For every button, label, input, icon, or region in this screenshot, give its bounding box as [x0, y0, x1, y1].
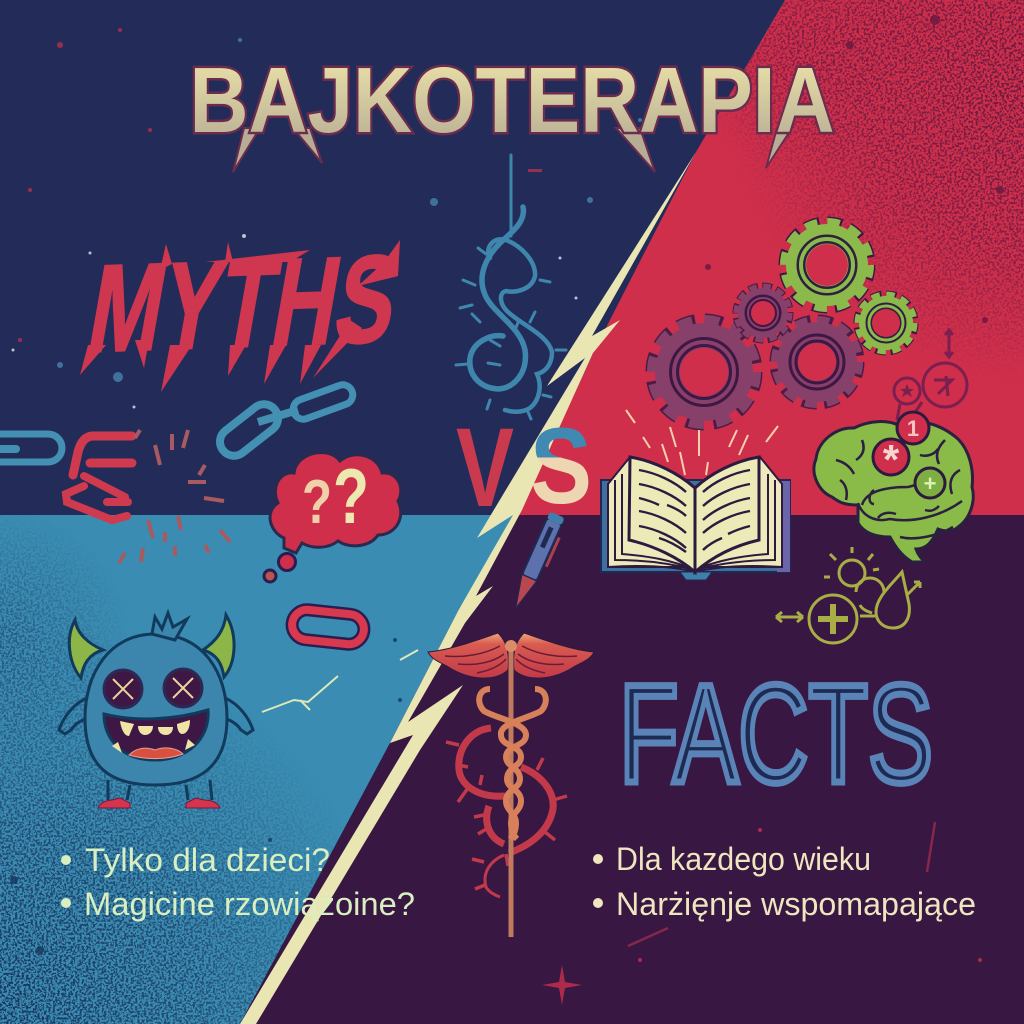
icon: crack scribble: [262, 650, 418, 712]
text: versus: [456, 405, 592, 530]
gear: small purple: [738, 288, 788, 338]
bullet list: facts: [593, 841, 976, 922]
icon: chain link lower: [291, 608, 365, 646]
icon: broken chain left: [0, 430, 230, 563]
bullet list: myths: [61, 842, 415, 922]
heading: myths: [79, 228, 409, 392]
text: versus: S: [530, 405, 592, 526]
wing: right: [514, 633, 594, 678]
bullet list: myths: Tylko dla dzieci?: [85, 842, 330, 878]
icon: open book: [601, 410, 790, 580]
icon: broken chain right: [214, 382, 356, 461]
staff: [508, 645, 514, 937]
icon: thorny vine top: [456, 155, 566, 419]
icon: brain: [814, 412, 973, 562]
icon: monster: [59, 613, 253, 808]
lightning bolt divider: [240, 152, 696, 1024]
feather lines: [445, 646, 577, 673]
icon: process symbols: [776, 547, 920, 643]
icon: thought bubble: [264, 452, 401, 582]
gear: small green: [859, 296, 913, 350]
gear: large purple: [655, 323, 753, 421]
bullet list: myths: Magicine rzowiążoine?: [84, 886, 415, 922]
thorn rings: [446, 728, 567, 897]
icon: pen: [509, 512, 567, 612]
gear: medium purple: [777, 322, 857, 402]
title: BAJKOTERAPIA: [190, 48, 834, 152]
bullet list: facts: Narżięnje wspomapające: [616, 886, 976, 922]
icon: thought bubble: ?: [302, 468, 332, 537]
text: versus: V: [456, 405, 514, 530]
serpents: [479, 689, 546, 839]
wing: left: [428, 633, 508, 678]
gear: large green: [786, 224, 868, 306]
heading: myths: MYTHS: [79, 228, 409, 379]
icon: symbols over brain: [894, 330, 967, 420]
staff knob: [505, 640, 517, 652]
icon: caduceus: [428, 633, 594, 937]
icon: brain: *: [883, 436, 900, 483]
icon: gears: [655, 224, 913, 421]
icon: brain: 1: [907, 416, 919, 441]
bullet list: facts: Dla kazdego wieku: [616, 841, 871, 877]
icon: thought bubble: ?: [333, 452, 369, 540]
icon: brain: +: [924, 471, 936, 496]
